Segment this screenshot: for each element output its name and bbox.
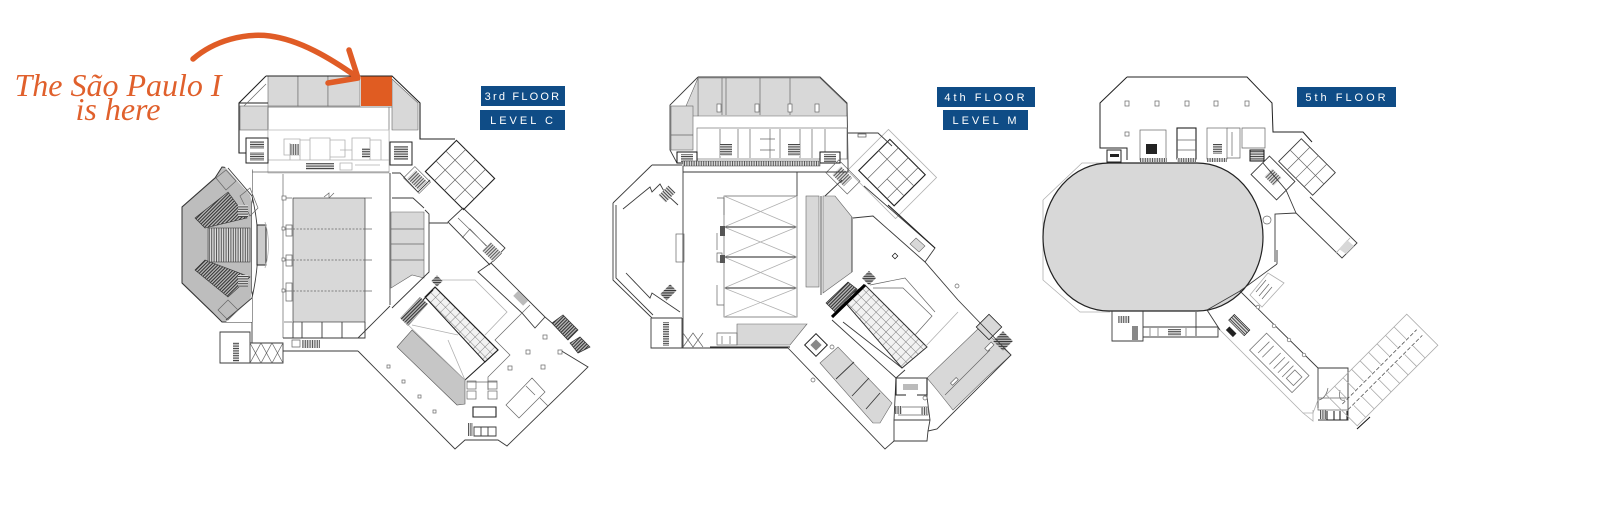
label: 3rd floor: [481, 86, 565, 106]
floor plan: 5th floor: [1043, 77, 1438, 429]
gray strips east of hall: [806, 196, 852, 295]
label: 3rd floor: 3rd FLOOR: [485, 91, 561, 103]
gray offices: [670, 77, 848, 163]
highlighted room: São Paulo I: [361, 76, 392, 106]
west lobby octagon: [613, 165, 795, 348]
gray south pre-function: [710, 324, 807, 347]
floor plan: 4th floor: [613, 77, 1013, 449]
arrow to highlighted room: [193, 35, 358, 83]
south-east wing: west arm: [1207, 291, 1318, 413]
theater: [182, 166, 268, 322]
service core: [677, 128, 847, 166]
label: 4th floor: 4th FLOOR: [944, 92, 1028, 104]
main exhibition hall: [252, 172, 389, 351]
hall with crossed partitions: [717, 196, 797, 317]
building outline, north block: [239, 76, 455, 153]
south-west stub and loading bays: [220, 322, 358, 363]
gray meeting rooms row: [240, 76, 418, 130]
lower gallery stair: [1250, 273, 1284, 307]
callout text: The São Paulo I is here: [14, 67, 223, 127]
north-east service block: [1251, 139, 1335, 200]
south-east wing: elevators: [1303, 368, 1348, 421]
east gray rooms: [390, 173, 448, 308]
south rooms: [1112, 311, 1218, 341]
south-east wing outline and central elevators: [788, 300, 1011, 449]
ballroom with gray pre-function strip: [397, 275, 530, 405]
label: 4th floor: [937, 87, 1035, 107]
label: 5th floor: [1297, 87, 1396, 107]
south wing gray rooms: [820, 347, 892, 423]
oval arena: [1043, 163, 1263, 312]
service cores: [1107, 128, 1265, 162]
south-east wing: east guest rooms: [1326, 314, 1438, 429]
label: level M: LEVEL M: [952, 115, 1020, 127]
label: level M: [943, 110, 1028, 130]
callout text: The São Paulo I is here: is here: [75, 91, 161, 127]
tower north outline: [1100, 77, 1312, 160]
label: level C: [480, 110, 565, 130]
callout text: The São Paulo I is here: The São Paulo I: [14, 67, 223, 103]
north-east corridor wing: [1240, 163, 1357, 291]
east diagonal stair block: [458, 218, 502, 262]
ballroom grid: [826, 271, 958, 378]
north-east wing outline: [795, 133, 958, 300]
north-east diagonal service block: [826, 129, 937, 219]
label: level C: LEVEL C: [490, 115, 556, 127]
column markers: [811, 253, 959, 400]
label: 5th floor: 5th FLOOR: [1305, 92, 1389, 104]
stair cores: [246, 138, 412, 165]
service core: [268, 130, 389, 173]
floor plan: 3rd floor: [182, 76, 590, 449]
south wing gray rooms east: [927, 314, 1013, 410]
north-east diagonal service block: [392, 140, 495, 210]
south-east wing outline: [358, 208, 588, 449]
south-east wing details: [387, 315, 590, 436]
